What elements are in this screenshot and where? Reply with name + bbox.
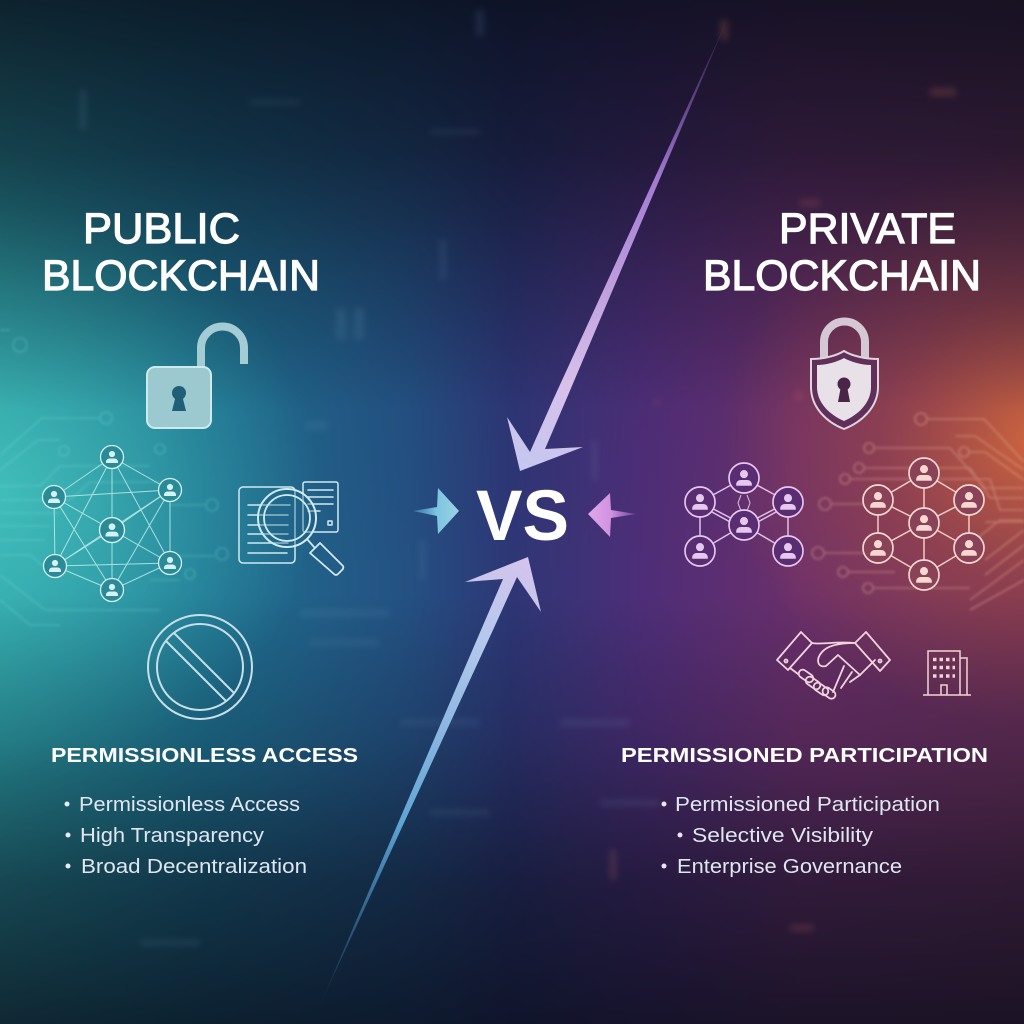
feature list: public — [64, 794, 307, 878]
feature list: public: Broad Decentralization — [81, 856, 307, 878]
icon: network of public nodes — [42, 446, 182, 602]
feature list: public: High Transparency — [80, 825, 264, 847]
panel: public blockchain — [42, 205, 358, 878]
feature list: private: Selective Visibility — [692, 825, 873, 847]
feature list: public: Permissionless Access — [79, 794, 300, 816]
center divider arrow: top — [507, 18, 728, 471]
icon: permissioned network one — [685, 463, 803, 566]
icon: prohibition sign — [148, 615, 252, 719]
subheading: permissioned participation: PERMISSIONED PARTICIPATION — [621, 745, 988, 767]
circuit traces: right — [812, 413, 1024, 610]
icon: handshake — [777, 632, 890, 700]
feature list: private: Permissioned Participation — [675, 794, 940, 816]
VS label: VS — [476, 477, 569, 556]
icon: documents under magnifying glass — [239, 482, 343, 575]
circuit traces: left — [0, 330, 228, 625]
subheading: permissionless access: PERMISSIONLESS ACCESS — [51, 745, 358, 767]
heading: public blockchain: BLOCKCHAIN — [42, 252, 320, 300]
heading: public blockchain: PUBLIC — [83, 205, 240, 253]
heading: private blockchain: PRIVATE — [779, 205, 956, 253]
panel: private blockchain — [621, 205, 988, 878]
feature list: private: Enterprise Governance — [677, 856, 902, 878]
heading: private blockchain — [703, 205, 981, 300]
small arrow: right — [588, 493, 636, 537]
small arrow: left — [413, 488, 459, 534]
icon: open padlock — [147, 326, 244, 428]
feature list: private — [662, 794, 940, 878]
icon: shield padlock — [811, 322, 878, 429]
heading: public blockchain — [42, 205, 320, 300]
heading: private blockchain: BLOCKCHAIN — [703, 252, 981, 300]
icon: permissioned network two — [863, 458, 984, 590]
center divider arrow: bottom — [320, 557, 541, 1005]
icon: office building — [923, 651, 971, 695]
